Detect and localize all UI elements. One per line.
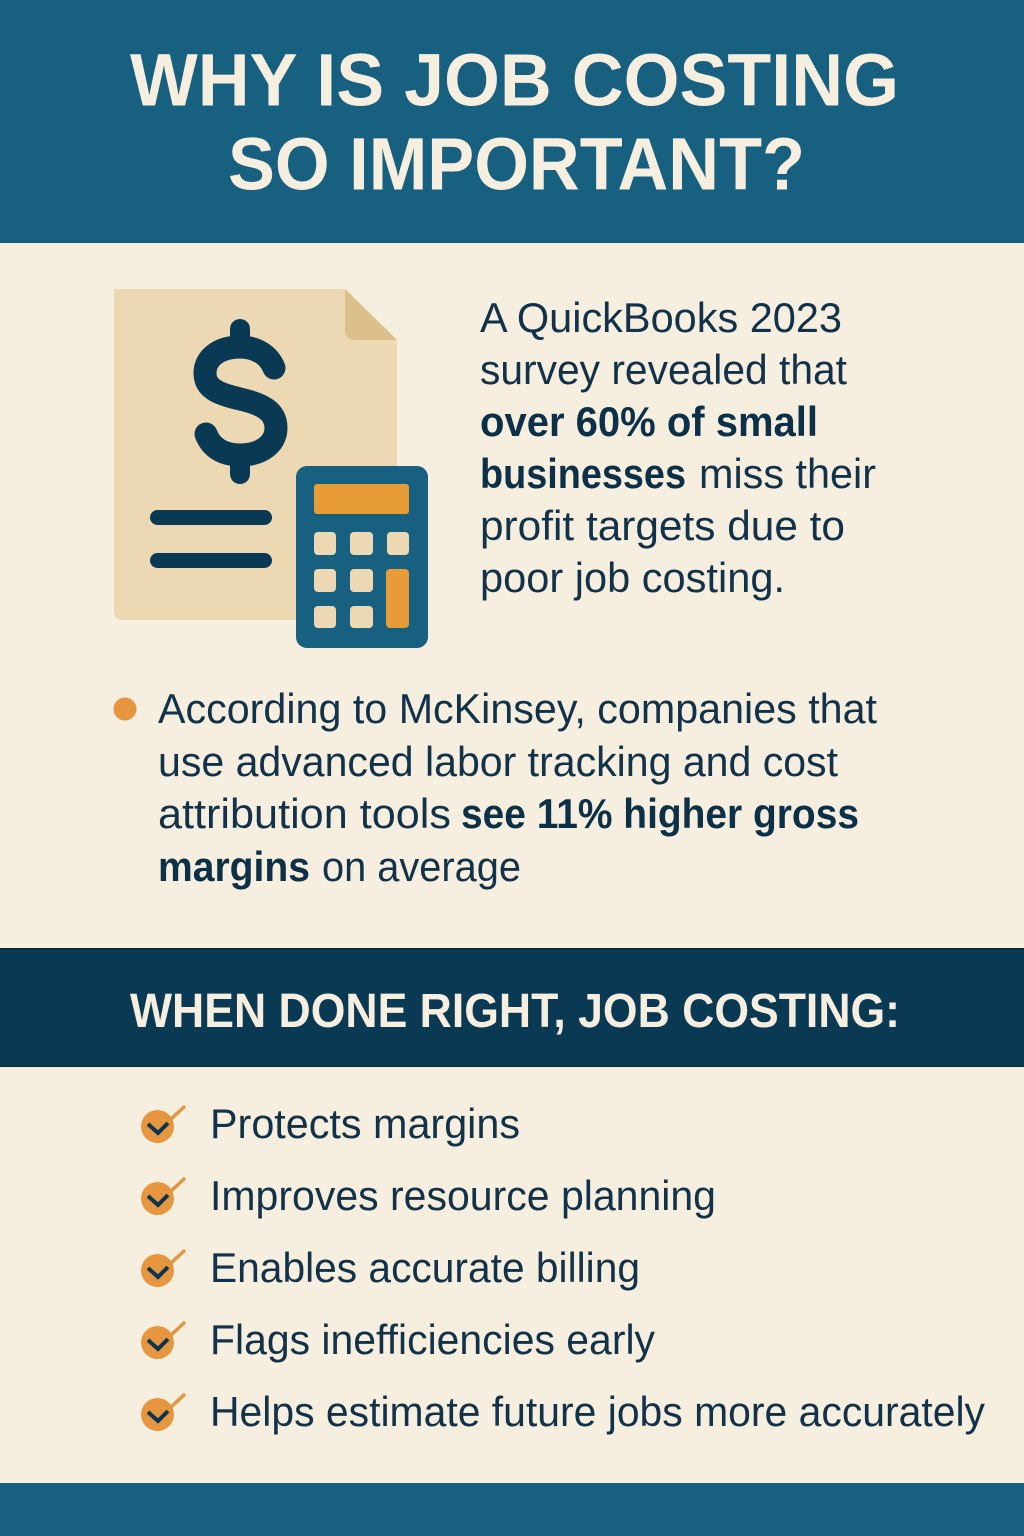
list item: improves resource planning: Improves resource planning [210,1172,716,1219]
list item: helps estimate future jobs: Helps estimate future jobs more accurately [210,1388,985,1435]
icon: orange bullet [114,698,136,720]
text block: McKinsey statistic: attribution tools [158,790,451,837]
section heading band: WHEN DONE RIGHT, JOB COSTING: [130,985,900,1038]
list item: protects margins: Protects margins [210,1100,520,1147]
text block: QuickBooks survey: over 60% of small [480,398,818,445]
text block: McKinsey statistic: on average [322,843,521,890]
text block: QuickBooks survey: A QuickBooks 2023 [480,294,842,341]
icon: document [114,289,397,620]
text block: McKinsey statistic: margins [158,843,310,890]
text block: McKinsey statistic: use advanced labor tracking and cost [158,738,838,785]
text block: QuickBooks survey: miss their [699,450,876,497]
icon: calculator [296,466,428,648]
text block: QuickBooks survey [480,294,876,601]
text block: QuickBooks survey: poor job costing. [480,554,785,601]
text block: McKinsey statistic: see 11% higher gross [461,790,859,837]
list item: enables accurate billing: Enables accurate billing [210,1244,640,1291]
text block: QuickBooks survey: businesses [480,450,686,497]
checklist [141,1100,985,1435]
text block: McKinsey statistic [158,685,877,890]
header band with title [0,0,1024,243]
text block: QuickBooks survey: profit targets due to [480,502,845,549]
section heading band [0,948,1024,1067]
icon: invoice document with dollar sign and calculator [114,289,428,648]
text block: QuickBooks survey: survey revealed that [480,346,847,393]
header band with title: SO IMPORTANT? [228,122,805,206]
list item: flags inefficiencies early: Flags inefficiencies early [210,1316,655,1363]
text block: McKinsey statistic: According to McKinsey, companies that [158,685,877,732]
footer band [0,1483,1024,1536]
header band with title: WHY IS JOB COSTING [130,38,899,122]
